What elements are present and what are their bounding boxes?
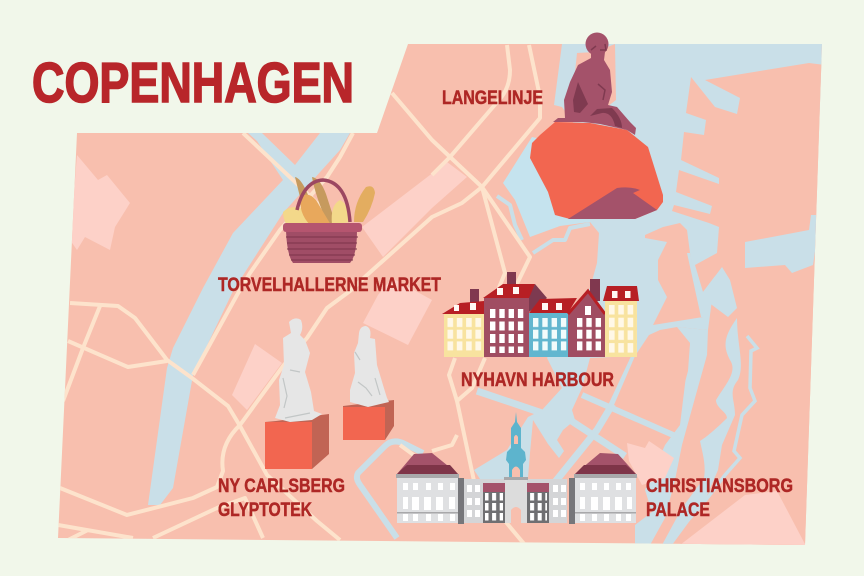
east land: Amager (672, 63, 825, 550)
north land strip (575, 44, 616, 106)
label: Ny Carlsberg Glyptotek: NY CARLSBERG (218, 475, 345, 497)
tower (506, 412, 526, 479)
chimneys (470, 289, 479, 303)
basket body (286, 231, 357, 263)
breads (295, 177, 312, 205)
centre tower base (505, 479, 527, 523)
thin channel (687, 253, 703, 317)
connecting wings (459, 479, 567, 523)
land block (614, 330, 690, 406)
handle (297, 180, 350, 222)
title: COPENHAGEN (32, 51, 354, 115)
large pedestal (265, 414, 329, 469)
icon: bread basket (283, 177, 375, 263)
label: Christiansborg Palace: PALACE (646, 499, 710, 521)
light city patches (70, 155, 467, 410)
side bays (458, 478, 464, 524)
label: Christiansborg Palace: CHRISTIANSBORG (646, 475, 793, 497)
label: Ny Carlsberg Glyptotek: GLYPTOTEK (218, 499, 312, 521)
icon: Christiansborg Palace (396, 412, 637, 524)
mauve house (484, 298, 529, 357)
icon: Little Mermaid on rock (530, 32, 663, 219)
left wing (397, 477, 459, 523)
south patches (627, 441, 806, 546)
label: Langelinje: LANGELINJE (442, 87, 543, 109)
roads (58, 45, 540, 545)
label: Christiansborg Palace (646, 475, 793, 521)
label: Torvelhallerne Market: TORVELHALLERNE MARKET (218, 274, 441, 296)
dormers (454, 287, 630, 311)
gabled house (568, 290, 605, 357)
right wing (574, 477, 636, 523)
small pedestal (343, 400, 394, 440)
river (148, 133, 350, 505)
harbour water (474, 44, 822, 545)
label: Nyhavn Harbour: NYHAVN HARBOUR (461, 369, 614, 391)
blue house (529, 313, 568, 357)
label: Ny Carlsberg Glyptotek (218, 475, 345, 521)
rock (530, 122, 663, 219)
inlets (357, 196, 680, 538)
yellow house right (605, 301, 637, 357)
female statue (350, 326, 389, 407)
icon: Nyhavn houses (442, 272, 639, 357)
male statue (275, 318, 322, 422)
central island (645, 223, 703, 325)
yellow house left (444, 314, 484, 357)
mermaid (586, 32, 608, 56)
east water basins (662, 215, 816, 545)
lake (503, 137, 590, 237)
icon: Glyptotek statues (265, 318, 394, 469)
